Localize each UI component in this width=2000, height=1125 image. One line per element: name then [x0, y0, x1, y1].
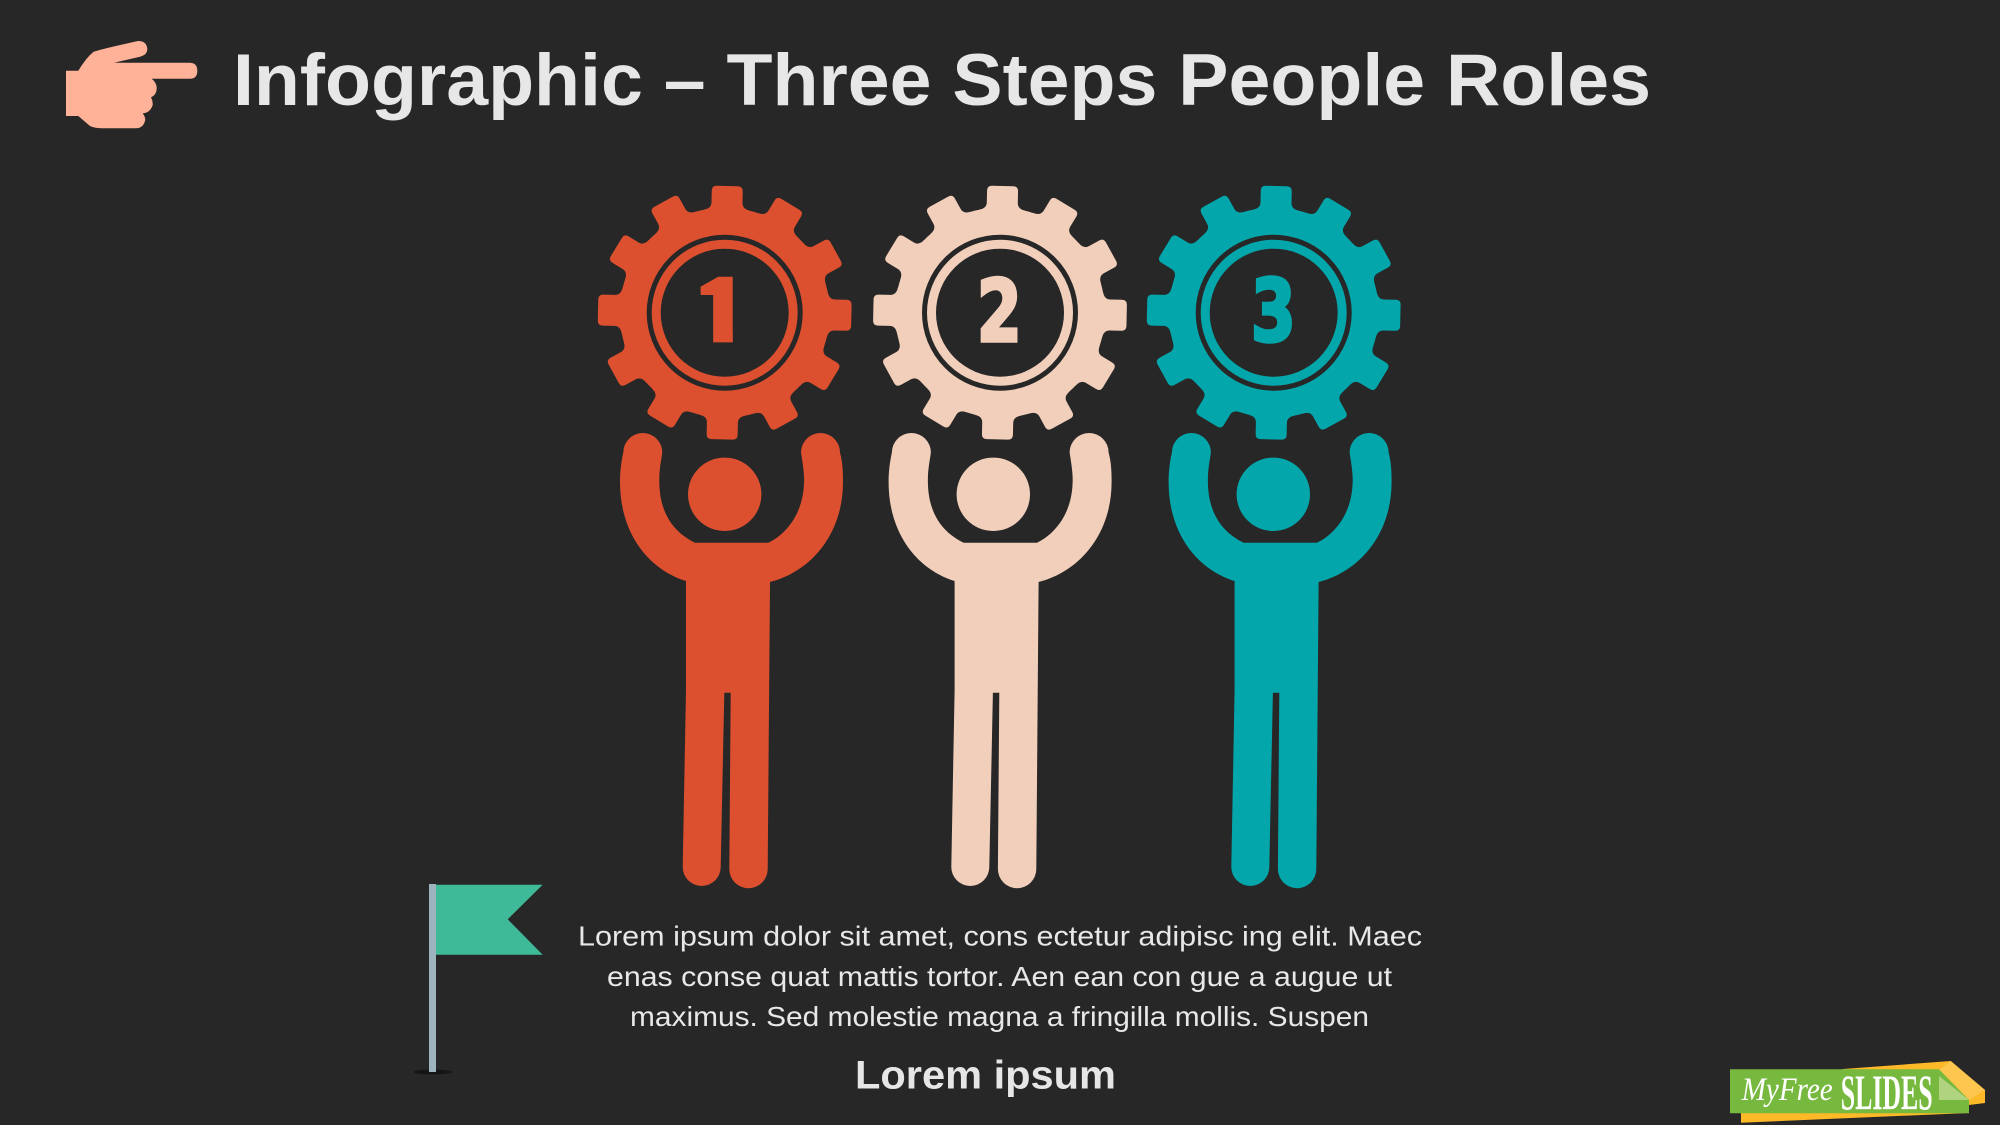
- gear 2: [823, 136, 1177, 489]
- step 3: gear and person: [1097, 136, 1450, 888]
- icon: flag: [414, 884, 543, 1074]
- step 2: gear and person: [823, 136, 1177, 888]
- person 2: [889, 433, 1112, 888]
- person 1: [620, 433, 843, 888]
- body text: maximus. Sed molestie magna a fringilla mollis. Suspen: [630, 1001, 1369, 1032]
- gear 1: 1: [685, 260, 747, 363]
- person 3: [1169, 433, 1392, 888]
- gear 2: 2: [977, 261, 1022, 361]
- icon: pointing hand: [66, 41, 197, 128]
- body text: [578, 921, 1422, 1032]
- gear 3: [1097, 136, 1450, 489]
- body text: Lorem ipsum dolor sit amet, cons ectetur adipisc ing elit. Maec: [578, 921, 1422, 952]
- logo: MyFreeSlides: [1730, 1061, 1985, 1123]
- logo: MyFreeSlides: MyFree: [1741, 1072, 1833, 1108]
- gear 3: 3: [1251, 261, 1296, 361]
- step 1: gear and person: [598, 186, 852, 888]
- gear 1: [598, 186, 852, 440]
- body text: enas conse quat mattis tortor. Aen ean con gue a augue ut: [607, 961, 1392, 992]
- subheading: Lorem ipsum: [855, 1054, 1116, 1098]
- title: Infographic – Three Steps People Roles: [233, 40, 1651, 121]
